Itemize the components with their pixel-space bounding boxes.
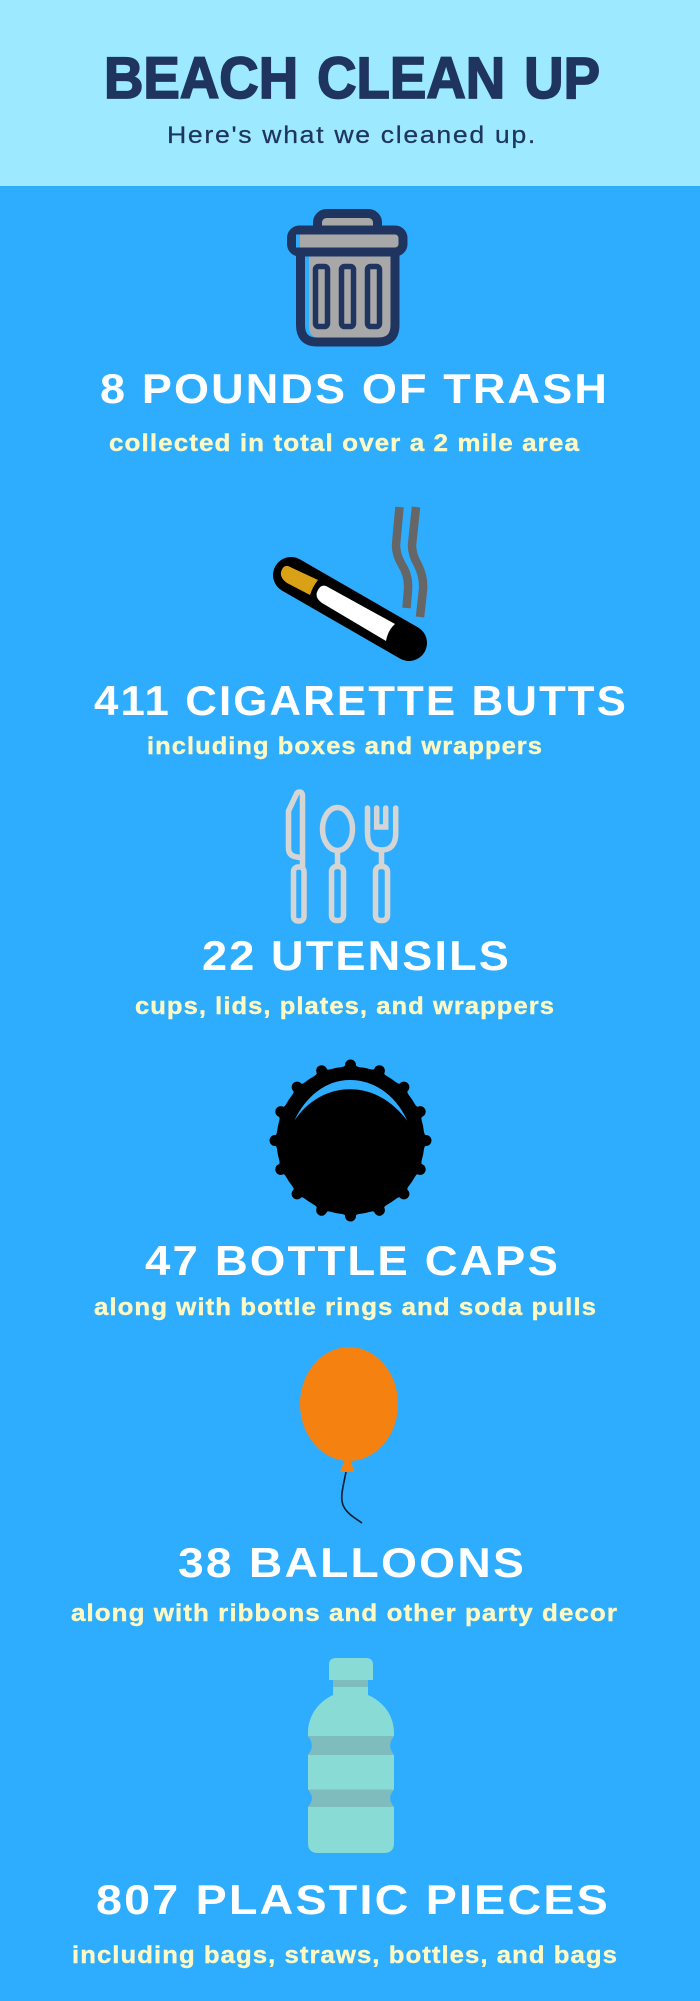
subtext: boxes and wrappers: including boxes and wrappers [147, 733, 543, 760]
icon: cigarette [281, 507, 423, 643]
icon: balloon [300, 1347, 398, 1523]
heading: 411 cigarette butts: 411 CIGARETTE BUTTS [94, 677, 628, 724]
subtext: bags, straws: including bags, straws, bottles, and bags [72, 1942, 618, 1969]
icon: plastic bottle [308, 1658, 394, 1853]
icon: bottle cap [270, 1060, 432, 1222]
header panel [0, 0, 700, 186]
icon: utensils [288, 792, 396, 921]
icon: trash can [292, 214, 403, 342]
heading: 38 balloons: 38 BALLOONS [178, 1539, 526, 1586]
subtitle: Here's what we cleaned up. [167, 122, 537, 149]
subtext: bottle rings: along with bottle rings and soda pulls [94, 1294, 597, 1321]
heading: 8 pounds of trash: 8 POUNDS OF TRASH [100, 365, 609, 412]
subtext: collected in total: collected in total over a 2 mile area [109, 430, 580, 457]
heading: 47 bottle caps: 47 BOTTLE CAPS [145, 1237, 560, 1284]
title: BEACH CLEAN UP [104, 46, 600, 111]
subtext: ribbons: along with ribbons and other party decor [71, 1600, 618, 1627]
heading: 807 plastic pieces: 807 PLASTIC PIECES [96, 1876, 610, 1923]
heading: 22 utensils: 22 UTENSILS [202, 932, 511, 979]
subtext: cups, lids: cups, lids, plates, and wrappers [135, 993, 555, 1020]
